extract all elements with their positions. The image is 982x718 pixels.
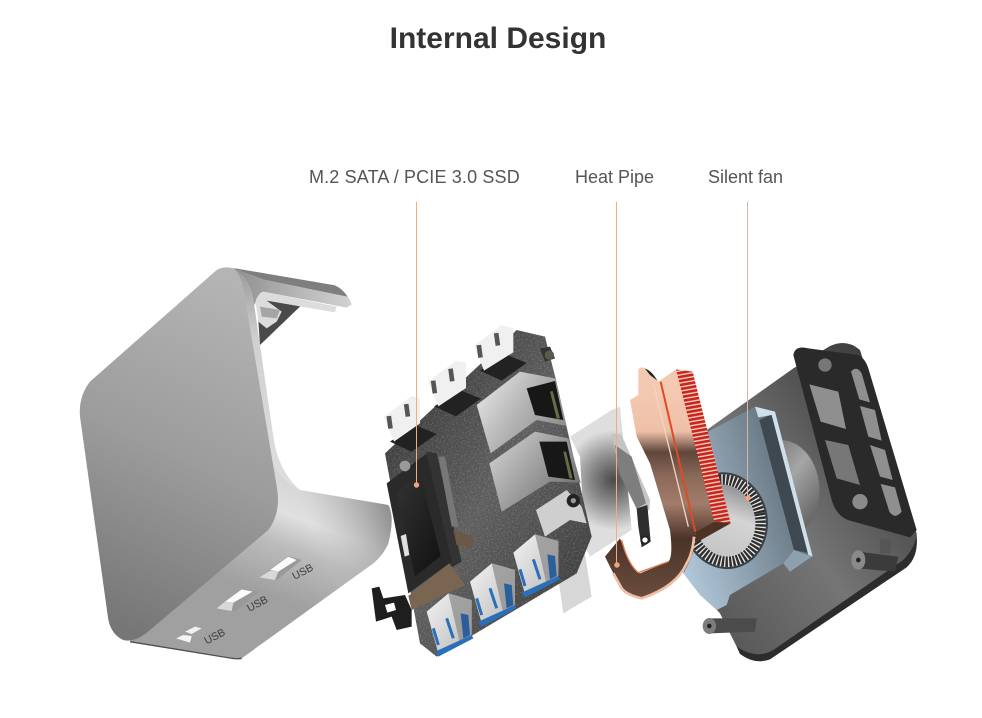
leader line: fan: [745, 202, 751, 501]
USB slot 2: USB: [245, 594, 270, 615]
DC power jack: [536, 490, 587, 537]
rear case mounting frame: [793, 347, 917, 537]
label: silent fan: Silent fan: [708, 167, 783, 187]
USB slot 1: [259, 556, 315, 583]
fan impeller: [673, 464, 777, 577]
standoff posts: [703, 538, 898, 634]
HDMI port 2: [428, 361, 481, 416]
rear case body: [683, 343, 917, 661]
lower plate: [555, 543, 592, 613]
aluminium shell: [80, 267, 392, 659]
shell interior rails: [255, 292, 337, 345]
M.2 SSD module: [387, 453, 452, 593]
thermal plate: [570, 407, 651, 557]
copper heat pipe: [605, 367, 730, 598]
audio jack: [540, 347, 555, 362]
HDMI port 3: [474, 325, 527, 381]
HDMI port 1: [384, 396, 437, 452]
mainboard: [372, 325, 592, 657]
clip strip: [612, 433, 650, 513]
PCB: [385, 330, 592, 657]
RJ45 port 2: [489, 432, 581, 512]
USB slot 2: [217, 588, 270, 615]
black bracket: [372, 587, 412, 630]
screw: [400, 461, 410, 471]
USB slot 1: USB: [290, 562, 315, 583]
heatsink base: [695, 522, 731, 543]
USB slot 3: [176, 620, 227, 647]
label: heat pipe: Heat Pipe: [575, 167, 654, 187]
shell side band: [233, 268, 300, 550]
shell top lip: [227, 267, 352, 308]
copper strap: [408, 563, 465, 610]
M.2 slot: [427, 452, 462, 568]
shell bottom band: [130, 463, 392, 659]
label: M.2 SSD: M.2 SATA / PCIE 3.0 SSD: [309, 167, 520, 187]
RJ45 port 1: [477, 372, 567, 453]
USB3 port 3: [513, 534, 560, 598]
heat pipe notch: [645, 369, 657, 381]
heat pipe tubes: [661, 382, 695, 532]
USB3 port 2: [470, 563, 517, 627]
title: Internal Design: [390, 22, 606, 55]
leader line: SSD: [414, 202, 419, 488]
case inner disc: [741, 440, 819, 540]
leader line: heat pipe: [614, 202, 620, 568]
rear housing with fan and heat pipe: [570, 343, 917, 661]
USB3 port 1: [427, 593, 473, 657]
shell front face: [80, 267, 278, 641]
heatsink fins: [676, 369, 731, 523]
USB slot 3: USB: [202, 626, 227, 647]
blower fan: [673, 407, 813, 610]
